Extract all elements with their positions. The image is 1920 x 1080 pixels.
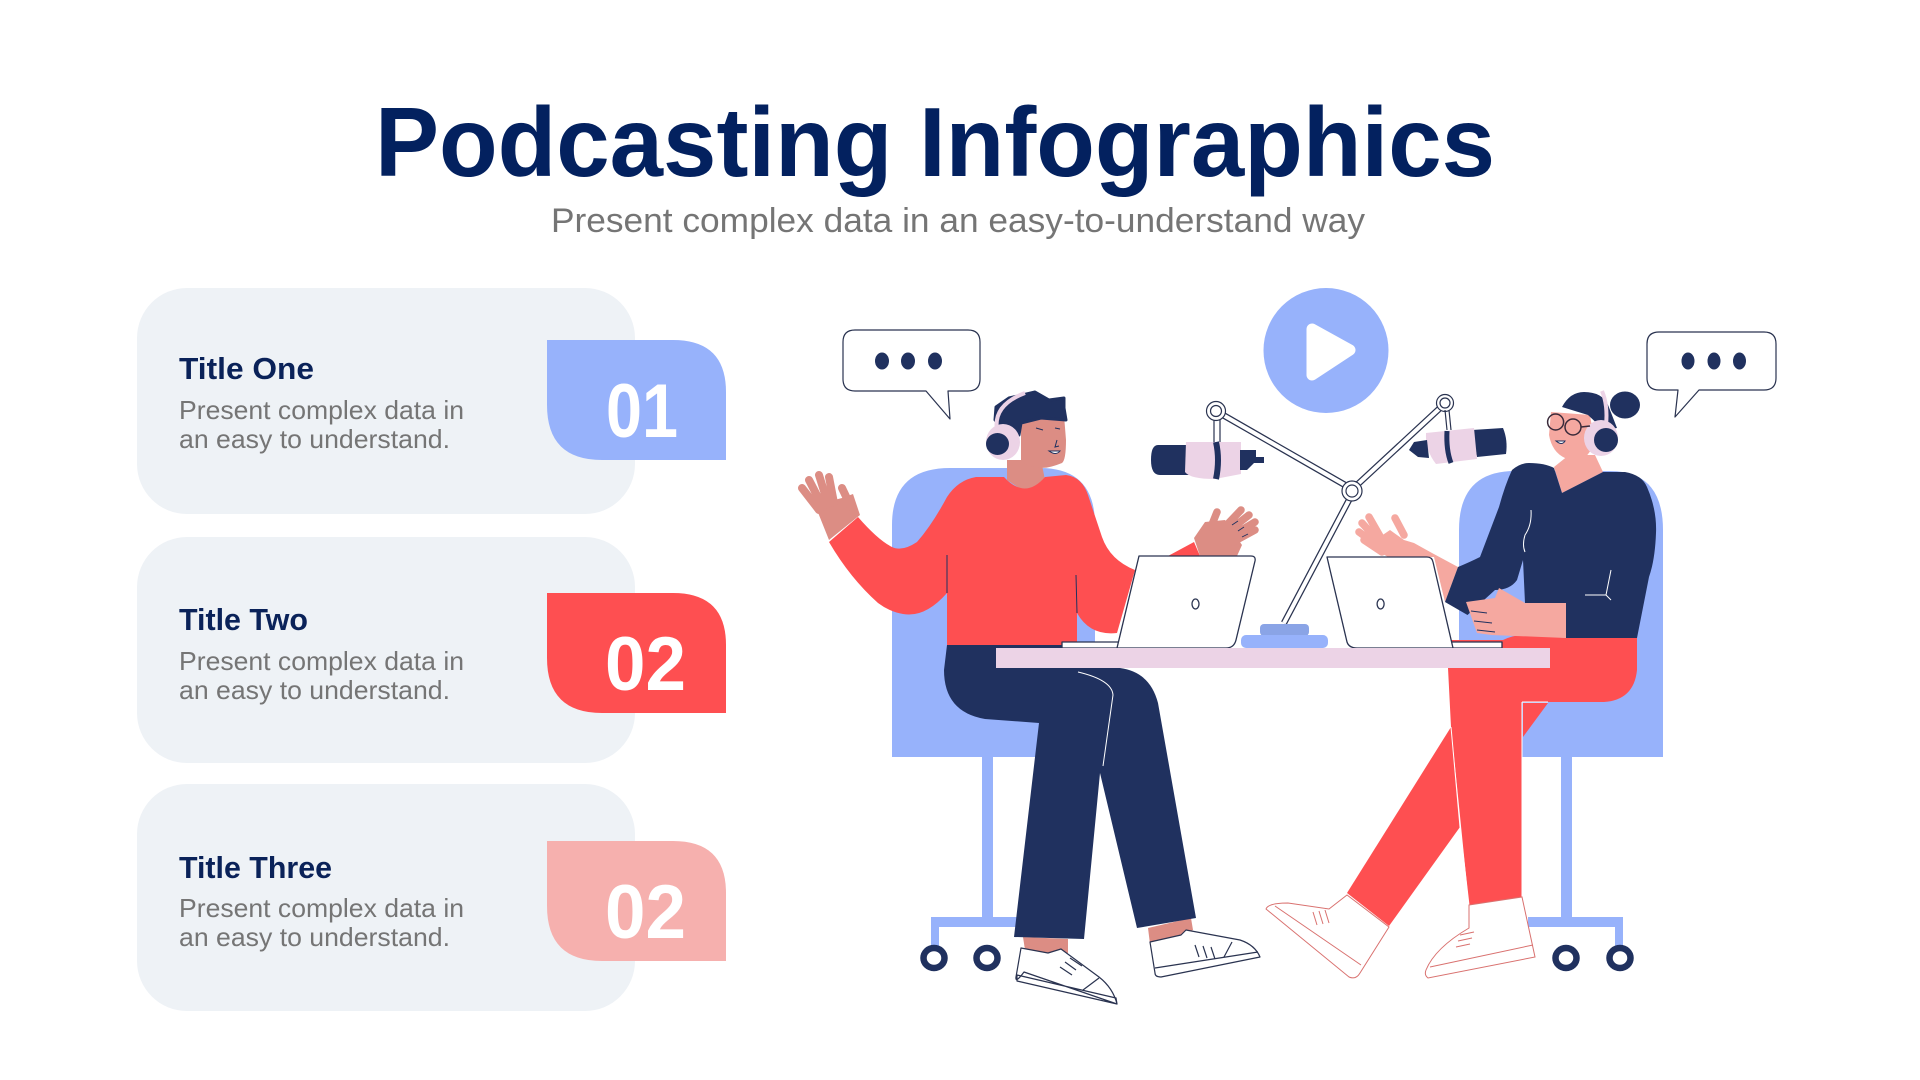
woman: trousers and shoes bbox=[1266, 635, 1637, 978]
title: Podcasting Infographics bbox=[375, 87, 1495, 197]
heading three: Title Three bbox=[179, 850, 332, 885]
speech bubble right bbox=[1647, 332, 1776, 417]
microphone boom stand bbox=[1206, 394, 1454, 648]
speech bubble left bbox=[843, 330, 980, 419]
microphone left bbox=[1151, 420, 1264, 479]
description one: Present complex data in bbox=[179, 395, 464, 425]
number tab 01 bbox=[547, 340, 726, 460]
microphone right bbox=[1409, 410, 1507, 464]
card background two bbox=[137, 537, 635, 763]
laptop right bbox=[1327, 557, 1502, 648]
icon: play button bbox=[1264, 288, 1388, 413]
panel: item two bbox=[137, 537, 726, 763]
right chair bbox=[1459, 471, 1663, 968]
panel: item three bbox=[137, 784, 726, 1011]
card background three bbox=[137, 784, 635, 1011]
panel: item one bbox=[137, 288, 726, 514]
man: trousers and shoes bbox=[944, 645, 1260, 1004]
card background one bbox=[137, 288, 635, 514]
woman: torso and arms bbox=[1359, 455, 1656, 638]
number 01: 01 bbox=[606, 369, 678, 454]
subtitle: Present complex data in an easy-to-understand way bbox=[551, 202, 1365, 240]
heading two: Title Two bbox=[179, 602, 308, 637]
woman: head with headphones bbox=[1548, 391, 1640, 458]
illustration: podcast scene bbox=[802, 288, 1776, 1004]
description three: Present complex data in bbox=[179, 893, 464, 923]
description one: an easy to understand. bbox=[179, 424, 450, 454]
man: head with headphones bbox=[986, 392, 1066, 468]
description two: an easy to understand. bbox=[179, 675, 450, 705]
heading one: Title One bbox=[179, 351, 314, 386]
table bbox=[996, 648, 1550, 668]
man: torso and arms bbox=[802, 460, 1255, 645]
laptop left bbox=[1062, 556, 1255, 648]
left chair bbox=[892, 468, 1095, 968]
number tab 03 bbox=[547, 841, 726, 961]
number tab 02 bbox=[547, 593, 726, 713]
number 02: 02 bbox=[605, 622, 686, 707]
description three: an easy to understand. bbox=[179, 922, 450, 952]
description two: Present complex data in bbox=[179, 646, 464, 676]
number label: 02 bbox=[605, 870, 686, 955]
